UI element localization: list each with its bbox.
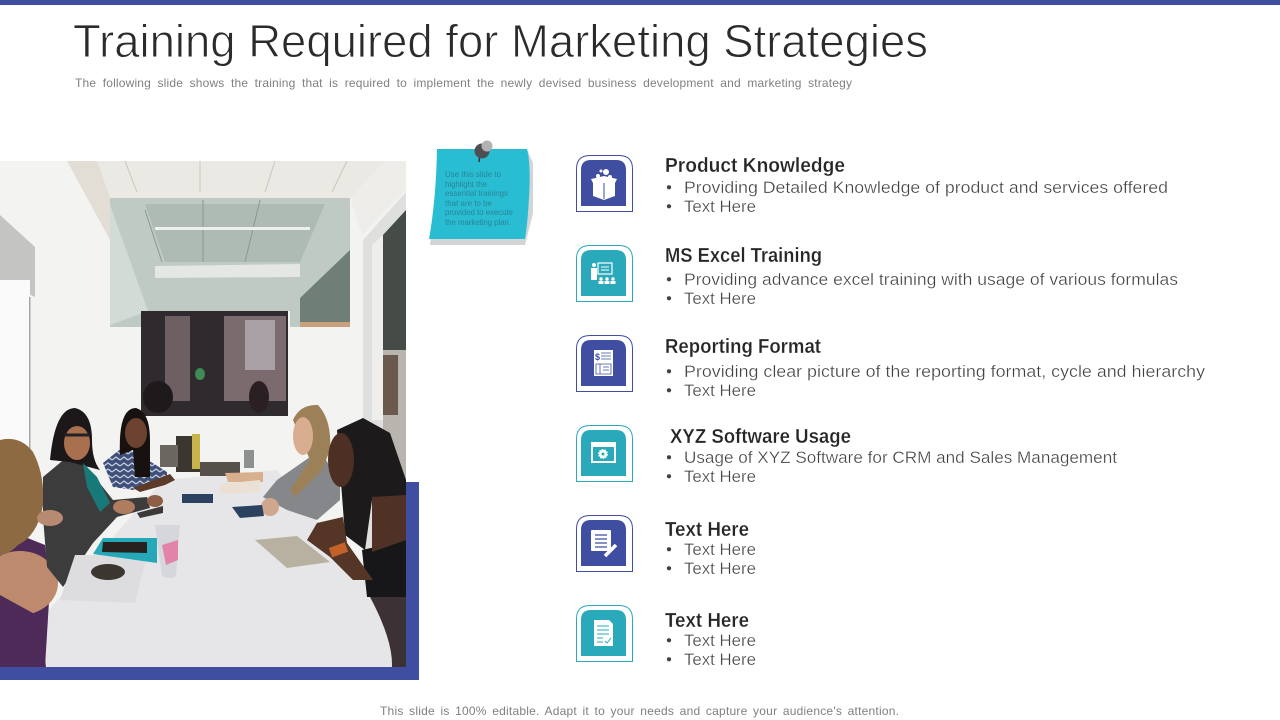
bullets: Providing clear picture of the reporting format, cycle and hierarchy xyxy=(684,362,1206,381)
bullets: Providing Detailed Knowledge of product and services offered xyxy=(684,178,1168,197)
bullets: Text Here xyxy=(684,381,756,400)
bullets xyxy=(666,362,1206,400)
bullets: Text Here xyxy=(684,559,756,578)
photo illustration: team meeting xyxy=(0,161,406,667)
row 6: text here xyxy=(576,606,756,669)
table items xyxy=(255,536,330,568)
bullets xyxy=(666,270,1178,308)
person in glasses xyxy=(43,457,150,587)
bullets: • xyxy=(666,270,672,289)
person far left xyxy=(0,535,50,667)
heading: XYZ Software Usage xyxy=(670,426,851,448)
bullets: • xyxy=(666,178,672,197)
sticky note text: highlight the xyxy=(445,180,488,189)
sticky note text: provided to execute xyxy=(445,208,514,217)
bullets: • xyxy=(666,381,672,400)
bullets: Text Here xyxy=(684,631,756,650)
table xyxy=(41,470,393,667)
top accent bar xyxy=(0,0,1280,5)
bullets: Providing advance excel training with usage of various formulas xyxy=(684,270,1178,289)
bullets: • xyxy=(666,362,672,381)
bullets: • xyxy=(666,650,672,669)
person in grey blazer xyxy=(263,458,340,520)
bullets: • xyxy=(666,631,672,650)
row 1: product knowledge xyxy=(576,155,1168,216)
icon: pushpin xyxy=(474,140,492,162)
bullets: • xyxy=(666,289,672,308)
row 4: xyz software usage xyxy=(576,426,1117,486)
icon: product box xyxy=(576,156,632,212)
bullets xyxy=(666,448,1117,486)
title: Training Required for Marketing Strategies xyxy=(73,15,928,67)
person in black top with braids xyxy=(362,540,406,597)
bullets: Text Here xyxy=(684,289,756,308)
table clutter xyxy=(176,436,200,472)
heading: Text Here xyxy=(665,610,749,632)
TV screen xyxy=(141,311,288,416)
blue offset frame xyxy=(0,482,419,680)
footer note: This slide is 100% editable. Adapt it to your needs and capture your audience's attention. xyxy=(380,704,899,718)
person in patterned top xyxy=(103,447,167,490)
sticky note text: that are to be xyxy=(445,199,493,208)
bullets: Text Here xyxy=(684,540,756,559)
subtitle: The following slide shows the training that is required to implement the newly devised business development and marketing strategy xyxy=(75,76,852,90)
sticky note with pin xyxy=(429,140,533,245)
heading: Text Here xyxy=(665,519,749,541)
icon: trainer with audience xyxy=(576,246,632,302)
bullets: Usage of XYZ Software for CRM and Sales Management xyxy=(684,448,1117,467)
icon: report document: $ xyxy=(595,352,600,362)
sticky note text xyxy=(445,170,514,227)
bullets: • xyxy=(666,467,672,486)
heading: MS Excel Training xyxy=(665,245,822,267)
bullets xyxy=(666,631,756,669)
row 2: ms excel training xyxy=(576,245,1178,308)
bullets: Text Here xyxy=(684,467,756,486)
icon: document with check xyxy=(576,606,632,662)
bullets xyxy=(666,178,1168,216)
icon: browser window with gear xyxy=(576,426,632,482)
bullets: • xyxy=(666,559,672,578)
sticky note text: Use this slide to xyxy=(445,170,502,179)
bullets: Text Here xyxy=(684,650,756,669)
sticky note text: essential trainings xyxy=(445,189,508,198)
row 3: reporting format xyxy=(576,336,1206,400)
bullets: • xyxy=(666,448,672,467)
sticky note text: the marketing plan. xyxy=(445,218,511,227)
icon: note with pencil xyxy=(576,516,632,572)
bullets: • xyxy=(666,197,672,216)
row 5: text here xyxy=(576,516,756,578)
photo block: meeting room with blue offset frame xyxy=(0,161,419,680)
icon: report document xyxy=(576,336,632,392)
heading: Product Knowledge xyxy=(665,155,845,177)
heading: Reporting Format xyxy=(665,336,821,358)
bullets: • xyxy=(666,540,672,559)
bullets: Text Here xyxy=(684,197,756,216)
bullets xyxy=(666,540,756,578)
